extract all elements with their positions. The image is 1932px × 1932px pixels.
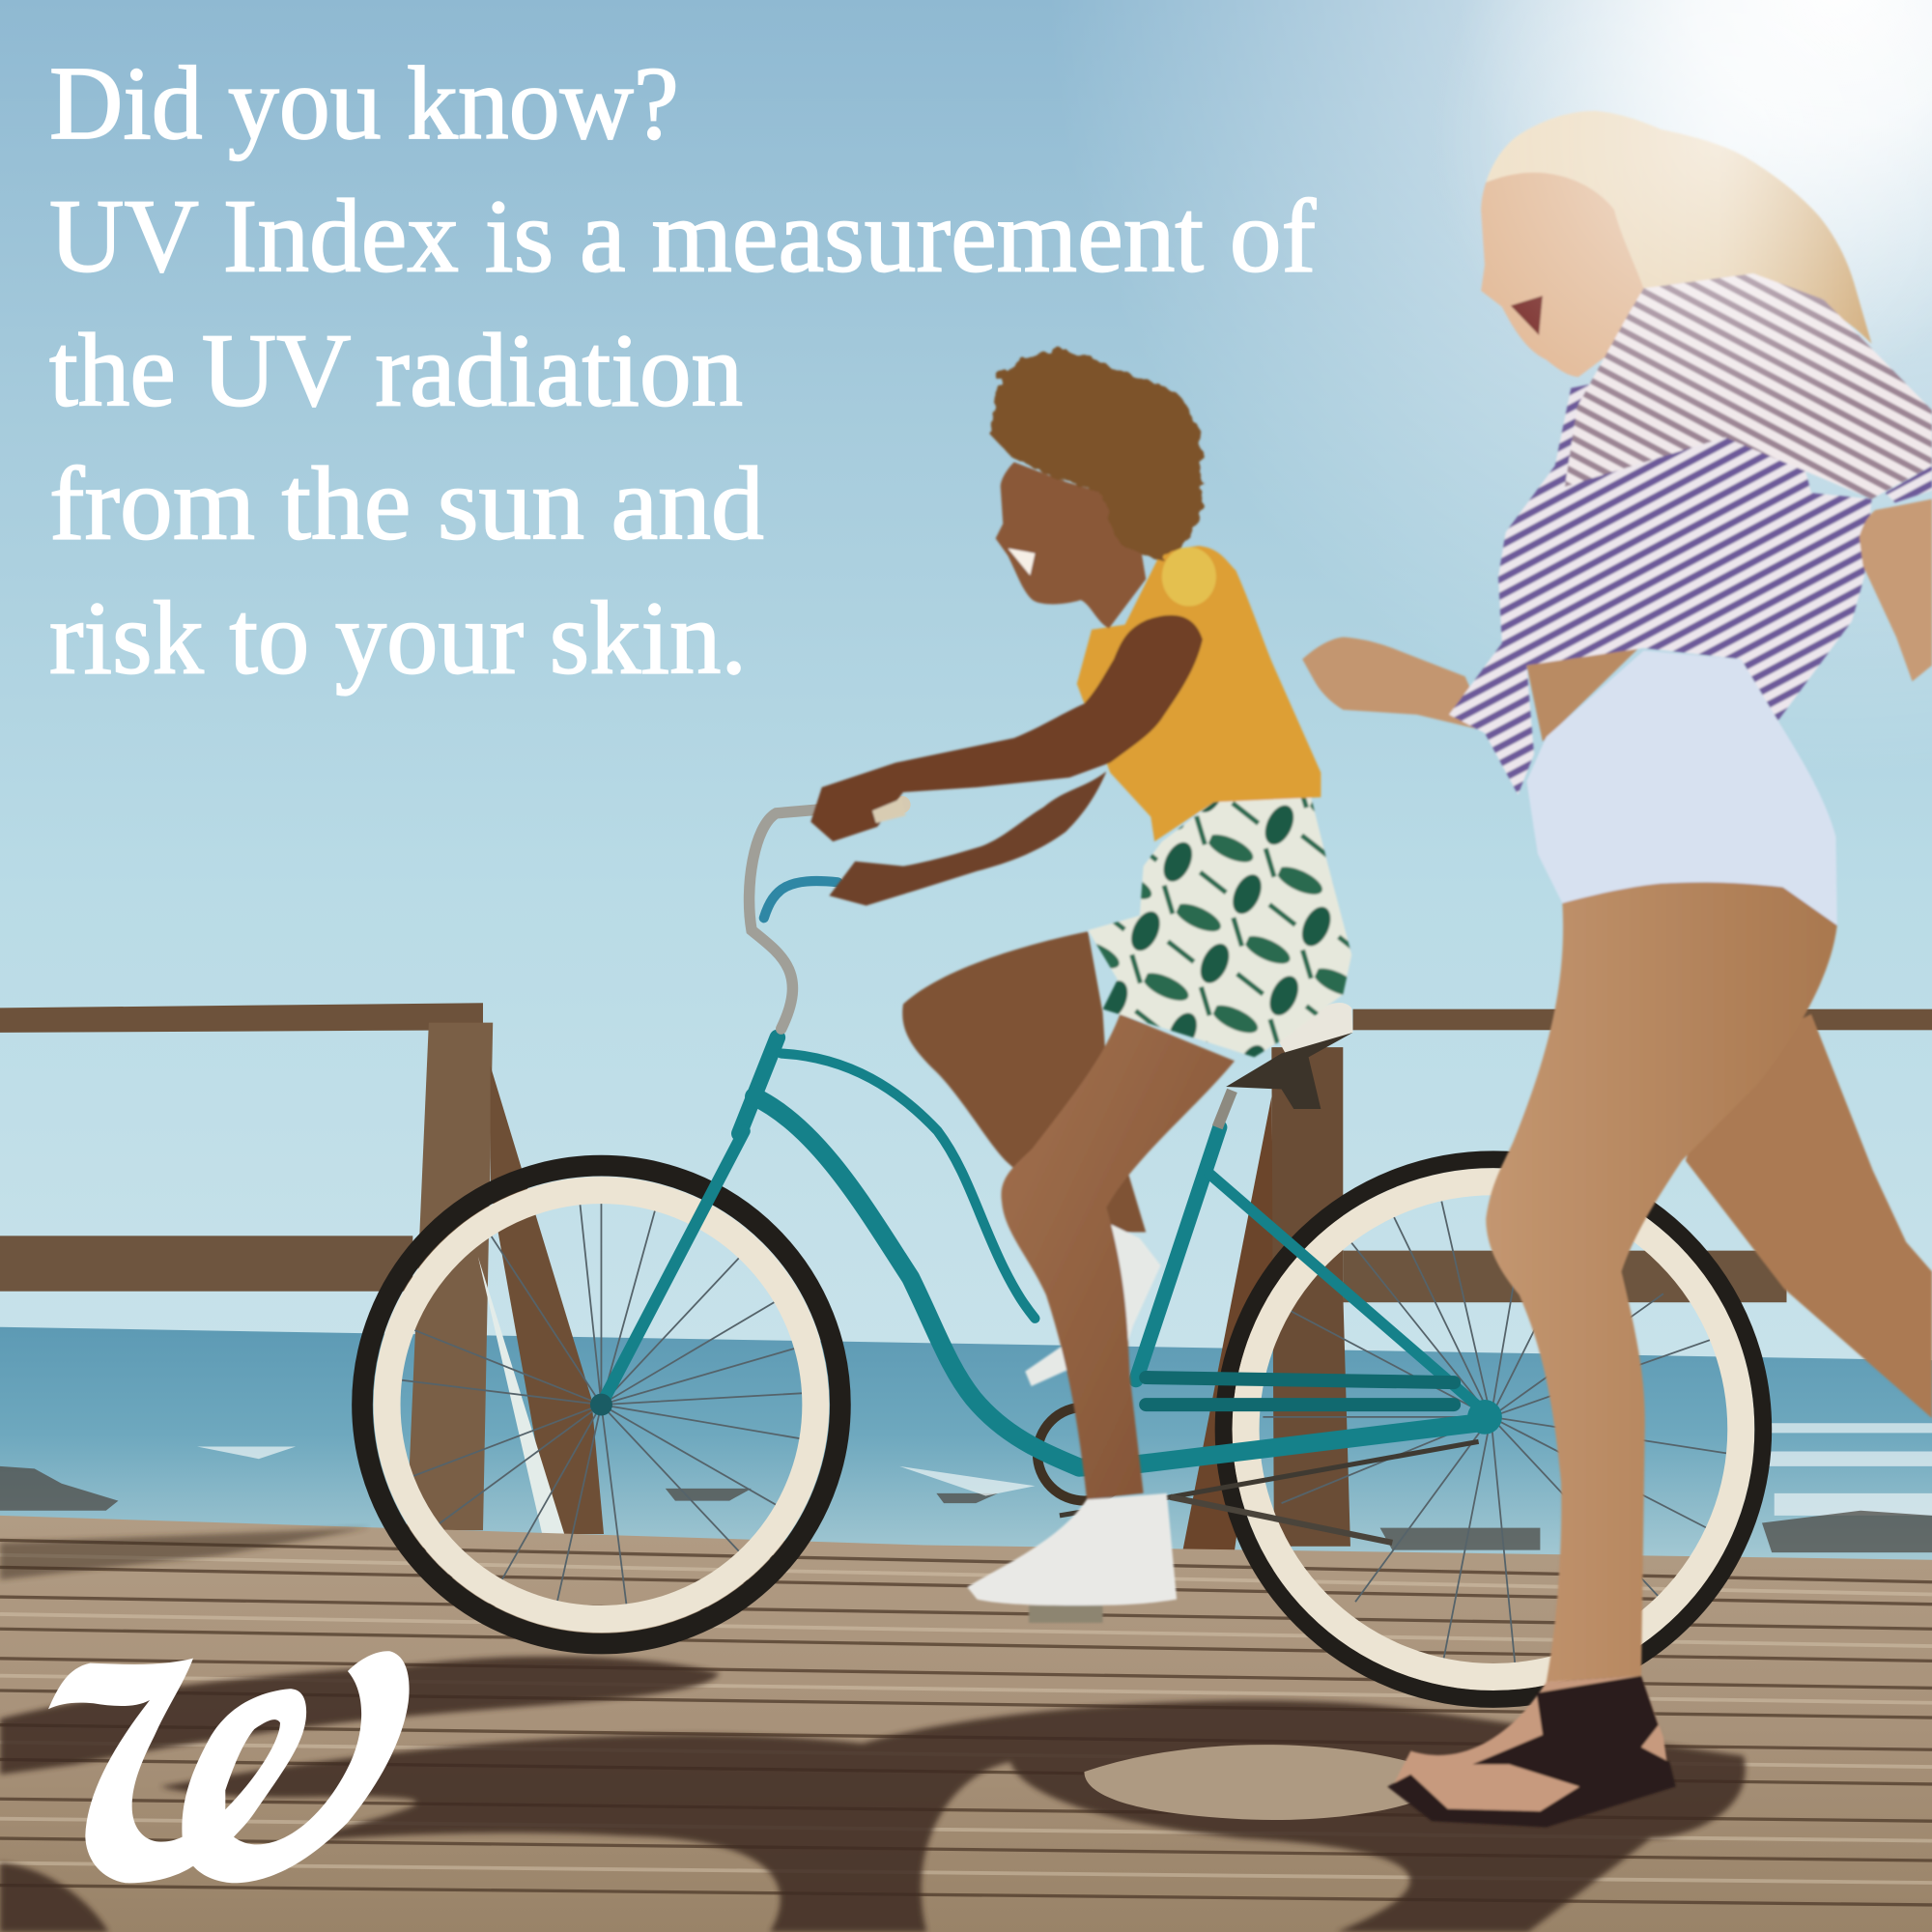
waist <box>1526 643 1644 742</box>
frame <box>590 1037 1502 1467</box>
front wheel <box>362 1166 840 1644</box>
wooden railing <box>0 1003 1932 1550</box>
rear wheel <box>1224 1159 1763 1699</box>
far arm <box>829 771 1106 906</box>
woman on bicycle <box>810 349 1351 1623</box>
bicycle <box>362 805 1763 1699</box>
hair glare overlay <box>1430 0 1932 443</box>
headline: UV Index is a measurement of <box>49 179 1317 295</box>
handlebars <box>750 805 902 1029</box>
sleeve cuff <box>1886 466 1932 502</box>
lens flare on shirt <box>1162 547 1216 607</box>
neck and face <box>1481 154 1651 377</box>
boardwalk deck <box>0 1516 1932 1932</box>
striped shirt sleeve <box>1565 273 1932 499</box>
neck and face <box>996 462 1146 629</box>
headline: from the sun and <box>49 445 764 561</box>
shorts <box>1088 792 1351 1057</box>
front leg <box>1486 882 1837 1682</box>
foot <box>1392 1676 1669 1824</box>
sneaker <box>967 1493 1177 1605</box>
bike and people shadows <box>0 1528 1746 1932</box>
headline: the UV radiation <box>49 313 743 429</box>
headline <box>49 45 1317 696</box>
smile <box>1008 549 1035 576</box>
back arm <box>1302 637 1490 732</box>
woman running <box>1302 111 1932 1828</box>
open mouth <box>1511 296 1543 335</box>
far leg <box>902 931 1146 1233</box>
sandal <box>1387 1676 1676 1828</box>
Walgreens W logo <box>48 1651 410 1883</box>
afro hair <box>993 349 1203 560</box>
saddle <box>1217 1003 1353 1127</box>
headline: risk to your skin. <box>49 580 747 696</box>
striped shirt torso <box>1449 273 1872 795</box>
near arm <box>1860 499 1932 681</box>
sea <box>0 1327 1932 1565</box>
sky background <box>0 0 1932 1368</box>
back leg <box>1686 1014 1932 1418</box>
near leg <box>1001 1014 1235 1499</box>
near arm <box>810 615 1203 841</box>
brake grip <box>872 799 906 823</box>
headline: Did you know? <box>49 45 679 161</box>
blonde hair <box>1486 111 1872 344</box>
chainring and chain <box>1060 1441 1479 1516</box>
torso shirt <box>1077 546 1321 841</box>
far sneaker <box>1025 1218 1161 1386</box>
sun glare <box>0 0 1932 887</box>
white shorts <box>1526 650 1837 925</box>
